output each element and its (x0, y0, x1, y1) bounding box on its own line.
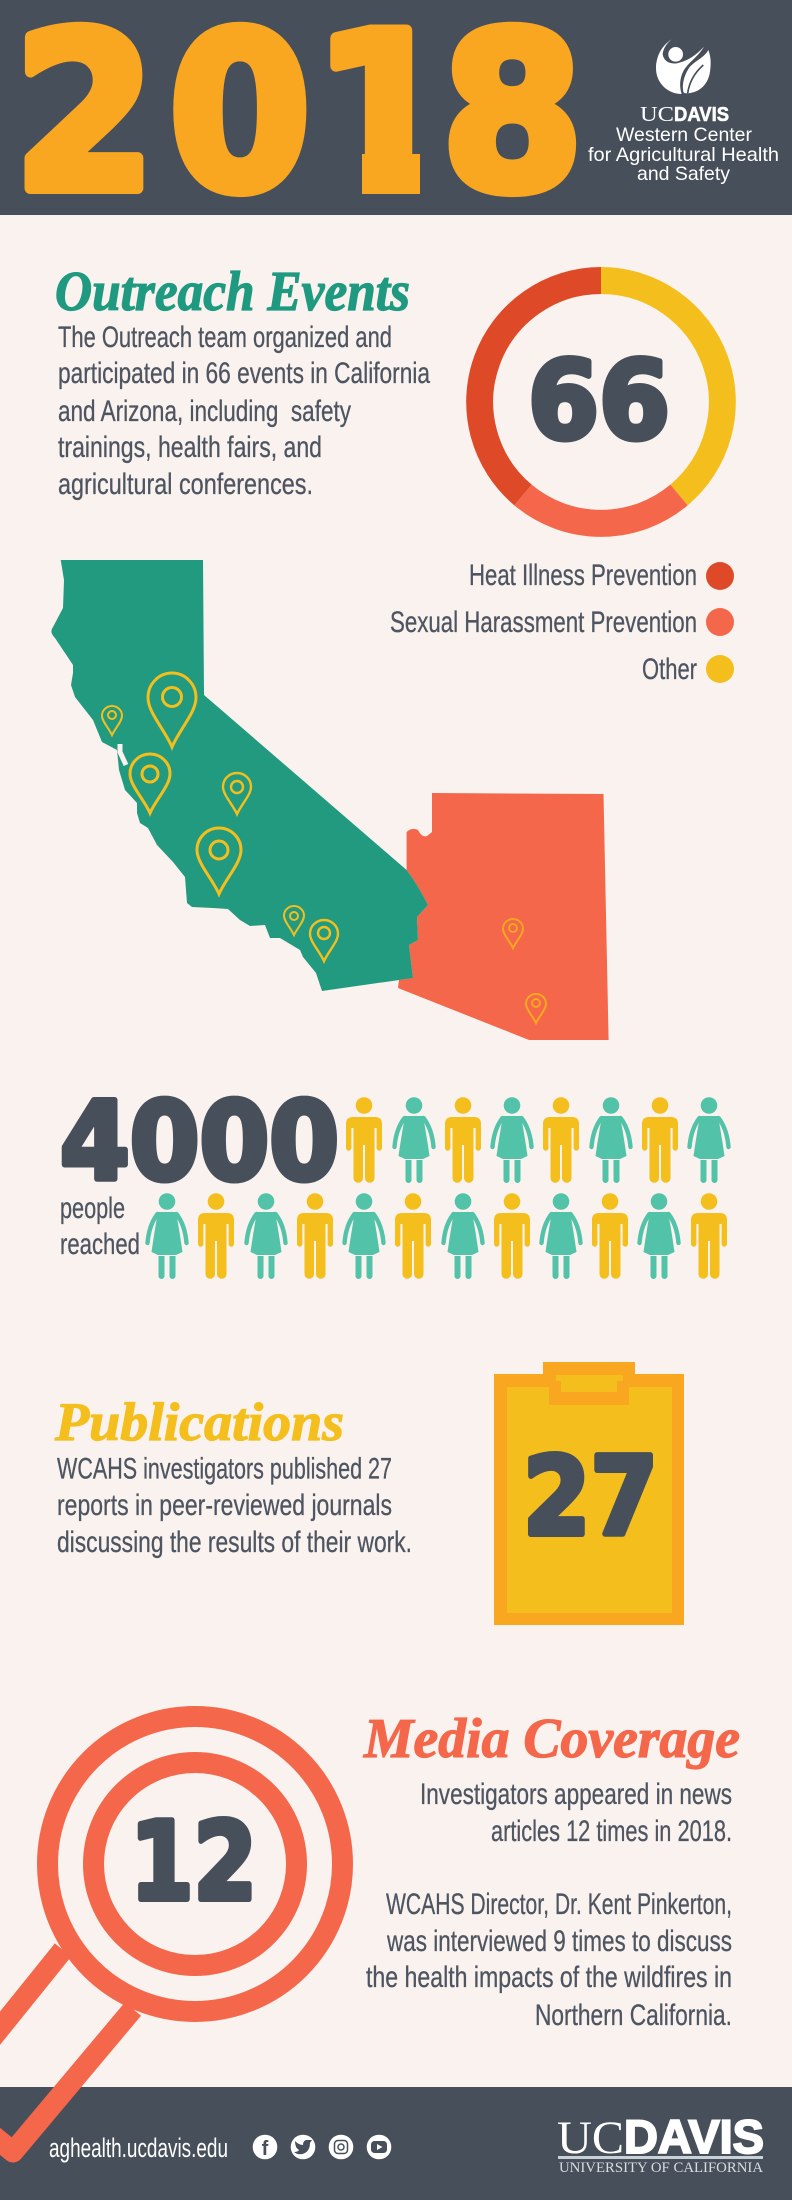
icon: clipboard (494, 1362, 684, 1625)
text: publications description: discussing the results of their work. (57, 1526, 412, 1559)
stat: 4000: 4000 (60, 1080, 339, 1205)
map pins: Arizona (503, 919, 546, 1023)
logo text: UC Davis Western Center: Western Center (616, 124, 752, 146)
heading: Outreach Events: Outreach Events (55, 261, 410, 323)
text: publications description: WCAHS investigators published 27 (57, 1452, 392, 1486)
logo: UC Davis University of California (557, 2110, 764, 2176)
footer url: aghealth.ucdavis.edu (49, 2133, 228, 2163)
text: publications description (57, 1452, 412, 1559)
text: publications description: reports in peer-reviewed journals (57, 1489, 392, 1522)
logo text: UC Davis Western Center (588, 102, 779, 185)
legend (390, 559, 734, 686)
icon: twitter (291, 2135, 315, 2159)
logo: UC Davis University of California: UNIVERSITY OF CALIFORNIA (559, 2160, 763, 2176)
map: Arizona (398, 793, 609, 1040)
text: outreach description: and Arizona, including safety (58, 395, 351, 428)
map pins: California (102, 673, 338, 961)
heading: Publications: Publications (54, 1392, 344, 1452)
text: media description: Northern California. (535, 1999, 732, 2032)
heading: Media Coverage: Media Coverage (363, 1708, 740, 1770)
icons: people row 2 (148, 1193, 727, 1279)
donut chart: 66 events (480, 280, 722, 523)
text: outreach description: The Outreach team organized and (58, 321, 392, 354)
logo text: UC Davis Western Center: and Safety (637, 163, 730, 185)
icon: youtube (367, 2135, 391, 2159)
label: people reached: reached (60, 1228, 140, 1261)
donut value: 66: 66 (528, 339, 670, 464)
icon: facebook: f (262, 2138, 269, 2160)
icons: people row 1 (346, 1097, 728, 1183)
label: people reached: people (60, 1192, 125, 1225)
map: California (51, 560, 428, 991)
icon: instagram (329, 2135, 353, 2159)
legend item: sexual harassment: Sexual Harassment Prevention (390, 606, 697, 639)
icon: facebook (253, 2135, 277, 2160)
logo text: UC Davis Western Center: for Agricultural Health (588, 144, 779, 166)
legend item: other: Other (642, 653, 697, 686)
text: outreach description (58, 321, 430, 501)
logo: UC Davis University of California: DAVIS (624, 2110, 764, 2163)
text: outreach description: agricultural conferences. (58, 468, 313, 501)
clipboard value: 27: 27 (523, 1435, 658, 1560)
icon: WCAHS logo (656, 39, 711, 94)
magnifier value: 12: 12 (130, 1800, 257, 1925)
icon: magnifying glass (0, 1716, 342, 2152)
text: outreach description: trainings, health fairs, and (58, 431, 322, 464)
text: media description (366, 1778, 732, 2032)
footer band (0, 2087, 792, 2200)
label: people reached (60, 1192, 140, 1261)
logo: UC Davis University of California: UC (557, 2112, 624, 2164)
legend item: heat illness: Heat Illness Prevention (469, 559, 697, 592)
text: outreach description: participated in 66 events in California (58, 357, 430, 390)
logo text: UC Davis Western Center: DAVIS (674, 104, 729, 126)
logo text: UC Davis Western Center: UC (640, 102, 674, 126)
header band (0, 0, 792, 215)
